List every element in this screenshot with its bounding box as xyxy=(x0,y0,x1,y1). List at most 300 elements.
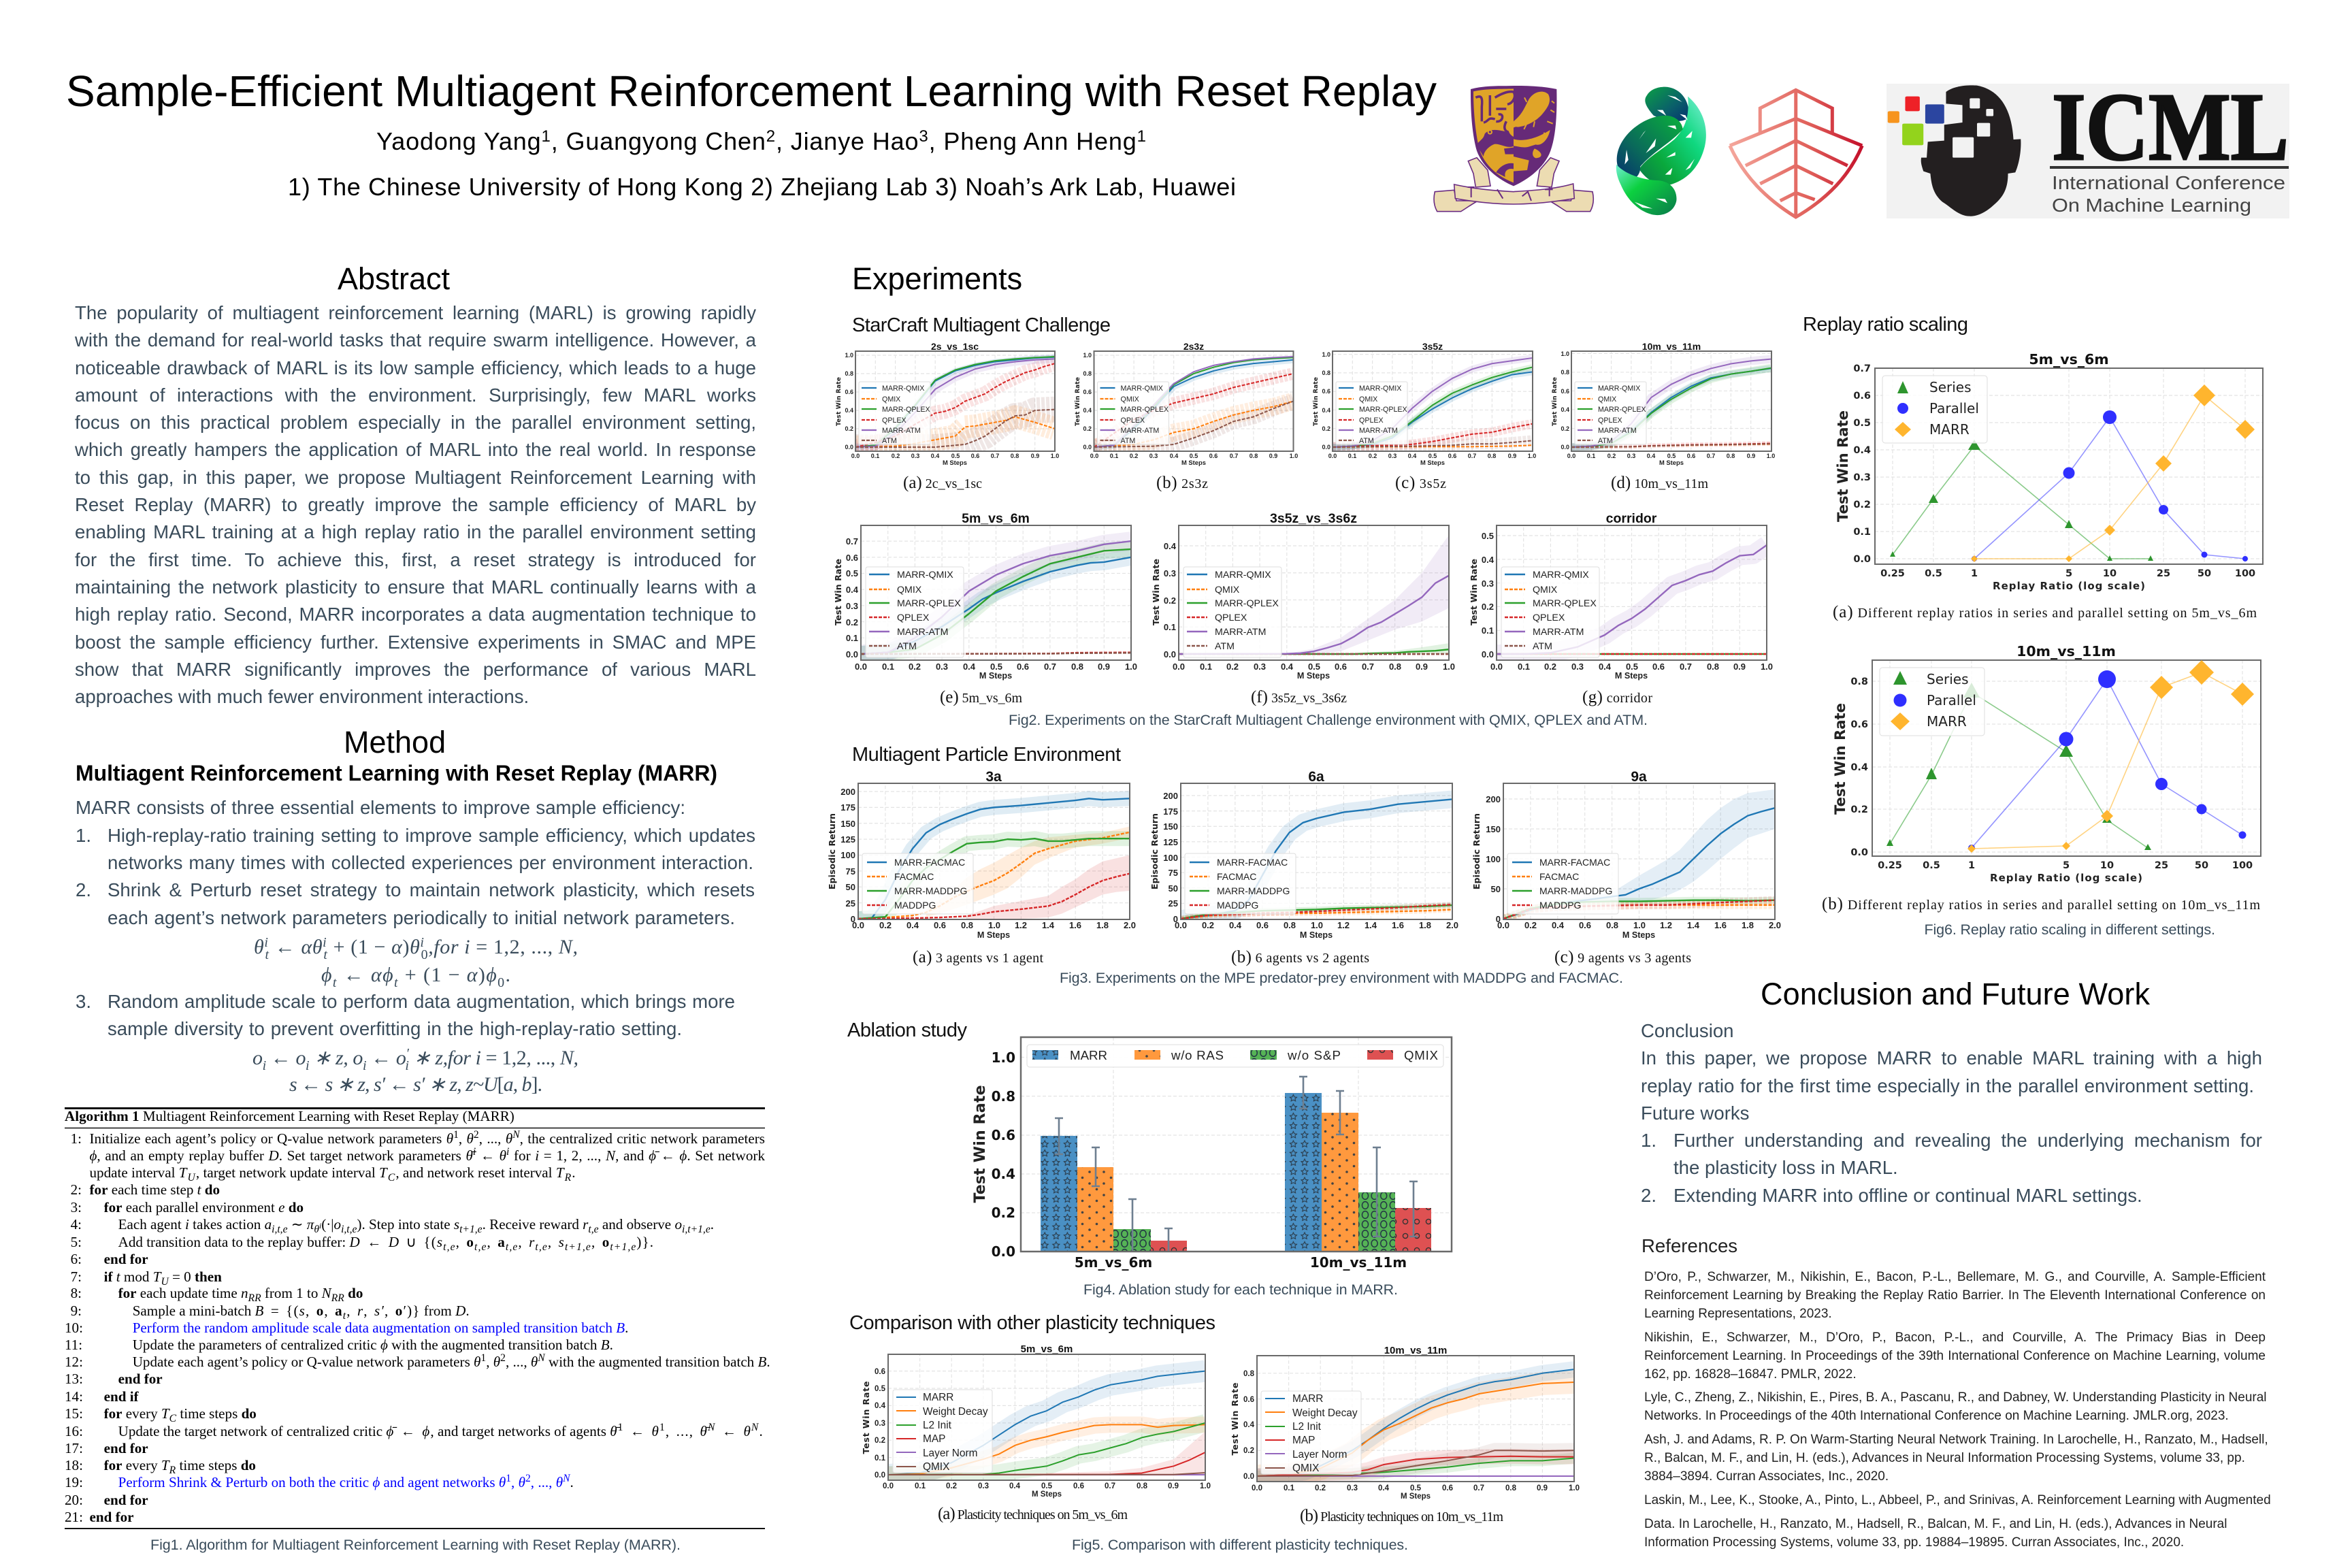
legend: MARR-ATM xyxy=(1120,427,1159,435)
affiliations: 1) The Chinese University of Hong Kong 2) Zhejiang Lab 3) Noah’s Ark Lab, Huawei xyxy=(288,173,1236,201)
y ticks: 0.2 xyxy=(845,425,853,432)
y ticks: 0.4 xyxy=(1853,445,1871,456)
x ticks: 0.2 xyxy=(1202,920,1214,930)
legend: MARR-QPLEX xyxy=(897,598,961,609)
x ticks: 0.5 xyxy=(1428,453,1437,459)
y ticks: 0.4 xyxy=(1482,555,1494,565)
x ticks: 0.0 xyxy=(1328,453,1337,459)
abstract text: with the demand for real-world tasks that require swarm intelligence. However, a xyxy=(75,329,756,350)
caption: (b) 6 agents vs 2 agents: (b) 6 agents vs 2 agents xyxy=(1231,948,1369,966)
authors: , Guangyong Chen xyxy=(551,127,766,155)
legend xyxy=(1027,1045,1443,1067)
legend: QPLEX xyxy=(1120,416,1145,425)
x ticks: 0.2 xyxy=(909,662,921,672)
y label: Episodic Return xyxy=(827,813,837,889)
legend: w/o RAS xyxy=(1171,1048,1224,1062)
algorithm block: end for xyxy=(90,1509,134,1525)
algorithm block: for each time step t do xyxy=(90,1181,220,1198)
y ticks: 0.6 xyxy=(846,553,858,563)
x ticks: 1.8 xyxy=(1096,920,1109,930)
x ticks xyxy=(1497,920,1781,930)
legend: QMIX xyxy=(1598,395,1616,404)
legend xyxy=(1183,567,1281,657)
x ticks: 1.2 xyxy=(1015,920,1027,930)
chart title: 3a xyxy=(985,769,1002,785)
chart: 5m_vs_6m xyxy=(834,513,1137,681)
authors: 1 xyxy=(542,127,551,146)
x ticks: 0.7 xyxy=(1105,1482,1115,1490)
y ticks: 0.6 xyxy=(1243,1396,1254,1404)
legend: MAP xyxy=(1292,1435,1315,1446)
y ticks: 0.0 xyxy=(1561,444,1569,451)
legend: MARR-QPLEX xyxy=(1533,598,1597,609)
legend: MARR-QPLEX xyxy=(1598,406,1646,414)
legend: MADDPG xyxy=(1539,900,1581,911)
y ticks: 1.0 xyxy=(1322,351,1330,358)
icml subtitle: International Conference xyxy=(2052,172,2285,193)
y ticks: 0.7 xyxy=(846,536,858,546)
x ticks xyxy=(1567,453,1775,459)
x ticks: 0.5 xyxy=(1410,1484,1422,1492)
y ticks: 0.7 xyxy=(1853,363,1871,374)
legend: Layer Norm xyxy=(923,1448,977,1459)
y ticks: 0.8 xyxy=(1243,1370,1255,1378)
heading: conclusion: Conclusion and Future Work xyxy=(1761,977,2151,1011)
parallel line xyxy=(1974,417,2245,559)
y ticks: 1.0 xyxy=(992,1049,1015,1066)
icml subtitle 2: On Machine Learning xyxy=(2052,195,2251,216)
legend: Weight Decay xyxy=(1292,1407,1358,1419)
parallel markers xyxy=(1972,410,2248,561)
y ticks: 0.0 xyxy=(845,444,853,451)
x ticks: 0.0 xyxy=(851,453,860,459)
references list: Networks. In Proceedings of the 40th International Conference on Machine Learning. JMLR.org, 2023. xyxy=(1644,1409,2229,1423)
chart title: 5m_vs_6m xyxy=(2029,351,2109,368)
x ticks: 1.0 xyxy=(1761,662,1773,672)
x ticks: 0.8 xyxy=(961,920,973,930)
y ticks: 0.2 xyxy=(1850,804,1868,815)
legend: QMIX xyxy=(1404,1048,1439,1062)
caption: (c) 3s5z: (c) 3s5z xyxy=(1395,474,1446,492)
x ticks: 0.2 xyxy=(879,920,892,930)
algorithm block: 12: xyxy=(65,1354,83,1370)
abstract text: maintaining the network plasticity to ensure that MARL continually learns with a xyxy=(75,576,756,598)
chart: replay ratio 10m_vs_11m xyxy=(1832,643,2261,884)
x ticks: 2.0 xyxy=(1769,920,1781,930)
authors: , Jianye Hao xyxy=(776,127,919,155)
legend xyxy=(1507,853,1618,914)
y ticks: 0.0 xyxy=(1853,554,1871,565)
x ticks: 1.0 xyxy=(1125,662,1137,672)
x ticks: 0.3 xyxy=(1627,453,1635,459)
algorithm block: Algorithm 1 Multiagent Reinforcement Learning with Reset Replay (MARR) xyxy=(65,1108,514,1124)
y ticks: 125 xyxy=(1163,837,1178,847)
y ticks: 0.2 xyxy=(875,1437,885,1445)
caption: (f) 3s5z_vs_3s6z: (f) 3s5z_vs_3s6z xyxy=(1251,688,1347,706)
y ticks: 0.4 xyxy=(1322,407,1330,414)
x ticks: 1.2 xyxy=(1660,920,1672,930)
x ticks: 100 xyxy=(2232,860,2253,871)
equation 1: i xyxy=(264,935,268,950)
y ticks: 0.2 xyxy=(1243,1447,1254,1455)
chart: corridor xyxy=(1470,513,1772,681)
x ticks: 0.8 xyxy=(1284,920,1296,930)
x ticks: 0.0 xyxy=(852,920,864,930)
x ticks: 0.3 xyxy=(1254,662,1266,672)
x label: M Steps xyxy=(1297,671,1330,681)
x label: M Steps xyxy=(1032,1490,1062,1499)
equation 2: α)ϕ xyxy=(467,964,497,986)
y label: Test Win Rate xyxy=(1230,1383,1240,1455)
x ticks: 0.6 xyxy=(1209,453,1218,459)
x ticks: 1.4 xyxy=(1365,920,1377,930)
y ticks: 0.2 xyxy=(1322,425,1330,432)
legend: MARR-ATM xyxy=(1215,627,1266,638)
x ticks: 0.6 xyxy=(934,920,946,930)
y ticks: 0.4 xyxy=(1083,407,1092,414)
y ticks xyxy=(1561,350,1569,451)
y ticks: 0.3 xyxy=(1853,472,1871,483)
algorithm block: 20: xyxy=(65,1492,83,1508)
y ticks: 0.8 xyxy=(845,370,853,377)
x ticks: 0.9 xyxy=(1269,453,1277,459)
references list: Lyle, C., Zheng, Z., Nikishin, E., Pires, B. A., Pascanu, R., and Dabney, W. Understanding Plasticity in Neural xyxy=(1644,1390,2267,1405)
caption: (d) 10m_vs_11m: (d) 10m_vs_11m xyxy=(1611,474,1708,492)
x ticks: 0.8 xyxy=(1011,453,1019,459)
y ticks: 0.8 xyxy=(1561,369,1569,376)
legend: MARR-QPLEX xyxy=(1215,598,1279,609)
y ticks: 0.0 xyxy=(1322,444,1330,451)
caption: plasticity (a): (a) Plasticity techniques on 5m_vs_6m xyxy=(938,1505,1128,1523)
x ticks: 0.7 xyxy=(1707,453,1715,459)
chart title: 9a xyxy=(1631,769,1647,785)
subheading: ablation study: Ablation study xyxy=(847,1019,968,1041)
x ticks: 0.1 xyxy=(1200,662,1212,672)
x ticks: 1.0 xyxy=(1528,453,1536,459)
x label: M Steps xyxy=(1420,459,1445,466)
y ticks: 200 xyxy=(1163,791,1178,801)
legend: ATM xyxy=(1120,437,1135,445)
y ticks: 0.4 xyxy=(992,1166,1015,1182)
y label: Test Win Rate xyxy=(836,377,843,426)
legend: MARR-ATM xyxy=(882,427,921,435)
series markers xyxy=(1890,440,2153,561)
y ticks: 0.4 xyxy=(846,585,859,595)
algorithm block: end for xyxy=(104,1251,148,1267)
equation 1: θ xyxy=(254,936,264,958)
algorithm block: end for xyxy=(104,1440,148,1456)
heading: method: Method xyxy=(344,725,446,760)
abstract text: show that MARR significantly improves the performance of various MARL xyxy=(75,659,756,680)
y ticks xyxy=(1482,531,1494,659)
y ticks: 0.1 xyxy=(1482,625,1494,636)
x ticks: 0.3 xyxy=(978,1482,989,1490)
x ticks: 0.0 xyxy=(1490,662,1503,672)
algorithm block: Initialize each agent’s policy or Q-value network parameters θ1, θ2, ..., θN, the centralized critic network parameters xyxy=(90,1129,765,1147)
chart title: 10m_vs_11m xyxy=(2016,643,2116,659)
y ticks: 0.0 xyxy=(1243,1473,1254,1481)
algorithm block: for every TR time steps do xyxy=(104,1457,256,1476)
caption: fig 6: Fig6. Replay ratio scaling in different settings. xyxy=(1925,921,2215,938)
x ticks: 0.6 xyxy=(1652,662,1665,672)
legend: QPLEX xyxy=(1215,612,1247,623)
y ticks: 0.1 xyxy=(875,1454,886,1463)
y ticks xyxy=(1163,791,1178,924)
legend: Series xyxy=(1929,379,1972,395)
equation 1: i xyxy=(420,935,424,950)
legend: QPLEX xyxy=(897,612,930,623)
chart: replay ratio 5m_vs_6m xyxy=(1835,351,2263,592)
parallel line xyxy=(1972,679,2242,848)
equation 3: i xyxy=(405,1058,409,1073)
references list: 162, pp. 16828–16847. PMLR, 2022. xyxy=(1644,1367,1857,1382)
legend: FACMAC xyxy=(1539,871,1579,882)
chart: 2s_vs_1sc xyxy=(836,341,1059,466)
algorithm block: end if xyxy=(104,1388,139,1405)
chart: 3s5z_vs_3s6z xyxy=(1153,513,1455,681)
y ticks: 0.4 xyxy=(1243,1421,1255,1429)
x ticks: 0.2 xyxy=(1524,920,1537,930)
x ticks: 0.9 xyxy=(1168,1482,1179,1490)
y ticks: 0.3 xyxy=(1482,578,1494,589)
equation 1: t xyxy=(265,947,270,962)
y ticks: 0.0 xyxy=(1083,444,1092,451)
title: Sample-Efficient Multiagent Reinforcement Learning with Reset Replay xyxy=(66,67,1437,116)
y ticks: 25 xyxy=(846,898,855,909)
x ticks xyxy=(883,1482,1211,1490)
x ticks: 0.5 xyxy=(951,453,960,459)
conclusion text: In this paper, we propose MARR to enable MARL training with a high xyxy=(1641,1047,2262,1068)
x ticks: 1 xyxy=(1968,860,1975,871)
algorithm block: 16: xyxy=(65,1423,83,1439)
x ticks: 0.8 xyxy=(1389,662,1401,672)
y ticks xyxy=(1486,794,1501,924)
x ticks xyxy=(852,920,1136,930)
y ticks: 0.6 xyxy=(875,1368,885,1376)
subheading: comparison: Comparison with other plasticity techniques xyxy=(849,1312,1215,1334)
abstract text: to this gap, in this paper, we propose Multiagent Reinforcement Learning with xyxy=(75,467,756,488)
legend: QMIX xyxy=(1120,395,1139,404)
x ticks: 0.6 xyxy=(1073,1482,1084,1490)
legend: L2 Init xyxy=(923,1420,952,1431)
x ticks xyxy=(1878,860,2253,871)
x ticks: 0.9 xyxy=(1098,662,1110,672)
authors: 1 xyxy=(1137,127,1146,146)
y label: Test Win Rate xyxy=(1075,377,1081,426)
equation 1: α)θ xyxy=(391,936,420,958)
x ticks: 1.0 xyxy=(1569,1484,1580,1492)
y ticks: 175 xyxy=(840,802,855,813)
equation 4: s ← s ∗ z, s′ ← s′ ∗ z, z~U[a, b]. xyxy=(289,1073,542,1096)
x ticks xyxy=(1090,453,1298,459)
legend: MARR xyxy=(1929,421,1970,438)
y ticks xyxy=(1164,541,1177,659)
x ticks: 1.8 xyxy=(1742,920,1754,930)
algorithm block: Update the target network of centralized critic ϕ̄ ← ϕ, and target networks of agents θ̄1 ← θ1, ..., θ̄N ← θN. xyxy=(118,1422,764,1439)
chart title: 10m_vs_11m xyxy=(1642,341,1701,352)
x ticks: 0.7 xyxy=(1362,662,1374,672)
x ticks: 0.7 xyxy=(1468,453,1476,459)
y label: Test Win Rate xyxy=(1832,703,1848,815)
legend xyxy=(893,1390,992,1473)
x ticks: 0.6 xyxy=(1579,920,1591,930)
y ticks xyxy=(1243,1370,1255,1481)
x ticks: 1.0 xyxy=(1633,920,1646,930)
x ticks: 50 xyxy=(2195,860,2208,871)
x ticks: 0.2 xyxy=(892,453,900,459)
algorithm block: Perform Shrink & Perturb on both the critic ϕ and agent networks θ1, θ2, ..., θN. xyxy=(118,1473,574,1490)
caption: (c) 9 agents vs 3 agents: (c) 9 agents vs 3 agents xyxy=(1554,948,1691,966)
legend: QMIX xyxy=(923,1461,949,1473)
x label: M Steps xyxy=(977,930,1010,940)
equation 2: t xyxy=(394,975,398,990)
x ticks: 0.2 xyxy=(1130,453,1138,459)
legend: MARR-QPLEX xyxy=(1359,406,1407,414)
legend: MAP xyxy=(923,1433,945,1445)
x ticks: 1.0 xyxy=(1200,1482,1211,1490)
legend: ATM xyxy=(1598,437,1613,445)
equation 2: . xyxy=(505,964,510,986)
legend: QPLEX xyxy=(1533,612,1565,623)
references list: Nikishin, E., Schwarzer, M., D’Oro, P., Bacon, P.-L., and Courville, A. The Primacy Bias in Deep xyxy=(1644,1330,2266,1345)
algorithm block: 17: xyxy=(65,1440,83,1456)
x ticks: 0.4 xyxy=(963,662,976,672)
method text: each agent’s network parameters periodically to initial network parameters. xyxy=(108,907,735,928)
y ticks: 0.1 xyxy=(846,633,858,643)
y ticks xyxy=(1322,351,1330,451)
equation 1: = 1,2, ..., N, xyxy=(476,936,578,958)
caption: (a) 3 agents vs 1 agent: (a) 3 agents vs 1 agent xyxy=(913,948,1043,966)
x ticks: 0.5 xyxy=(1041,1482,1053,1490)
x ticks: 0.8 xyxy=(1707,662,1719,672)
x ticks: 0.6 xyxy=(1256,920,1269,930)
y label: Test Win Rate xyxy=(1552,377,1558,426)
x ticks: 0.9 xyxy=(1537,1484,1548,1492)
legend: MARR-QMIX xyxy=(882,385,924,393)
series markers xyxy=(1886,683,2151,850)
algorithm block: end for xyxy=(118,1371,163,1387)
x ticks: 0.1 xyxy=(915,1482,926,1490)
x ticks: 0.3 xyxy=(936,662,948,672)
legend: QMIX xyxy=(1215,585,1240,595)
algorithm block: 4: xyxy=(71,1216,82,1232)
chart: 10m_vs_11m xyxy=(1552,341,1775,466)
bars: 5m_vs_6m xyxy=(1041,1136,1187,1252)
x ticks: 1.2 xyxy=(1337,920,1350,930)
algorithm block: 18: xyxy=(65,1457,83,1473)
x ticks: 0.6 xyxy=(1687,453,1695,459)
y ticks: 0.8 xyxy=(992,1088,1015,1105)
y ticks: 0 xyxy=(851,914,855,924)
conclusion text xyxy=(1641,1020,2262,1206)
legend: MARR-QMIX xyxy=(1215,570,1271,581)
legend: ATM xyxy=(1215,641,1235,652)
heading: references: References xyxy=(1642,1235,1737,1256)
y ticks: 50 xyxy=(1491,884,1501,894)
legend: MARR-QMIX xyxy=(1533,570,1589,581)
chart title: corridor xyxy=(1606,511,1657,526)
legend: MARR xyxy=(1070,1048,1107,1062)
y label: Test Win Rate xyxy=(861,1382,871,1454)
legend: QMIX xyxy=(882,395,900,404)
y label: Test Win Rate xyxy=(833,559,843,625)
legend: MARR-MADDPG xyxy=(1217,885,1290,896)
chart: 9a xyxy=(1471,769,1781,940)
equation 1: i xyxy=(323,935,327,950)
method text: sample diversity to prevent overfitting in the high-replay-ratio setting. xyxy=(108,1018,682,1039)
equation 3: i xyxy=(263,1058,266,1073)
x ticks: 0.25 xyxy=(1880,568,1905,579)
legend xyxy=(1575,382,1646,445)
legend: QMIX xyxy=(1359,395,1377,404)
x ticks: 0.1 xyxy=(882,662,894,672)
references list: Learning Representations, 2023. xyxy=(1644,1307,1832,1321)
legend xyxy=(866,567,964,657)
y label: Test Win Rate xyxy=(1151,559,1161,625)
y ticks: 1.0 xyxy=(1561,350,1569,357)
equation 3: ∗ z,for i xyxy=(409,1047,486,1069)
equation 1: ← xyxy=(270,936,301,958)
equation 3: = 1,2, ..., N, xyxy=(486,1047,578,1069)
equation 3: ′ xyxy=(406,1046,409,1061)
references list: D’Oro, P., Schwarzer, M., Nikishin, E., Bacon, P.-L., Bellemare, M. G., and Courville, A. Sample-Efficient xyxy=(1644,1270,2266,1284)
equation 3: i xyxy=(363,1058,367,1073)
conclusion text: Future works xyxy=(1641,1102,1749,1124)
y ticks: 50 xyxy=(846,882,855,892)
legend xyxy=(1261,1391,1361,1474)
y ticks: 0.0 xyxy=(992,1243,1015,1260)
x ticks xyxy=(1175,920,1458,930)
y ticks: 100 xyxy=(1486,854,1501,864)
x ticks: 0.7 xyxy=(991,453,999,459)
x label: M Steps xyxy=(1401,1492,1431,1501)
chart title: 5m_vs_6m xyxy=(962,511,1030,526)
heading: experiments: Experiments xyxy=(852,261,1022,296)
abstract text: amount of interactions with the environment. Surprisingly, few MARL works xyxy=(75,385,756,406)
equation 1: αθ xyxy=(301,936,323,958)
equation 2: + (1 − xyxy=(399,964,466,986)
x ticks: 0.6 xyxy=(971,453,979,459)
y label: Episodic Return xyxy=(1471,813,1482,889)
algorithm block: 13: xyxy=(65,1371,83,1387)
algorithm block: 9: xyxy=(71,1303,82,1319)
x ticks xyxy=(1173,662,1455,672)
conclusion text: Extending MARR into offline or continual MARL settings. xyxy=(1673,1185,2142,1206)
legend: MARR-QMIX xyxy=(1598,385,1640,393)
y ticks: 0.8 xyxy=(1083,370,1092,377)
legend: ATM xyxy=(1359,437,1374,445)
y ticks: 0.5 xyxy=(875,1385,886,1393)
x ticks: 1.6 xyxy=(1069,920,1081,930)
caption: (b) 2s3z: (b) 2s3z xyxy=(1156,474,1208,492)
x ticks: 0.2 xyxy=(1369,453,1377,459)
legend: MARR-FACMAC xyxy=(1217,857,1288,868)
x ticks: 0.0 xyxy=(855,662,867,672)
caption: fig 4: Fig4. Ablation study for each technique in MARR. xyxy=(1083,1281,1398,1298)
y ticks: 0.2 xyxy=(992,1205,1015,1221)
algorithm block: Update the parameters of centralized critic ϕ with the augmented transition batch B. xyxy=(133,1337,613,1353)
legend: MARR xyxy=(1927,713,1967,730)
x ticks: 0.4 xyxy=(1229,920,1242,930)
method text: 1. xyxy=(76,825,91,846)
marr line xyxy=(1972,672,2242,849)
x ticks: 1.0 xyxy=(1051,453,1059,459)
x ticks: 0.4 xyxy=(931,453,939,459)
algorithm block: if t mod TU = 0 then xyxy=(104,1269,222,1288)
chart title: 6a xyxy=(1308,769,1324,785)
legend xyxy=(1185,853,1296,914)
y ticks: 0 xyxy=(1173,914,1178,924)
